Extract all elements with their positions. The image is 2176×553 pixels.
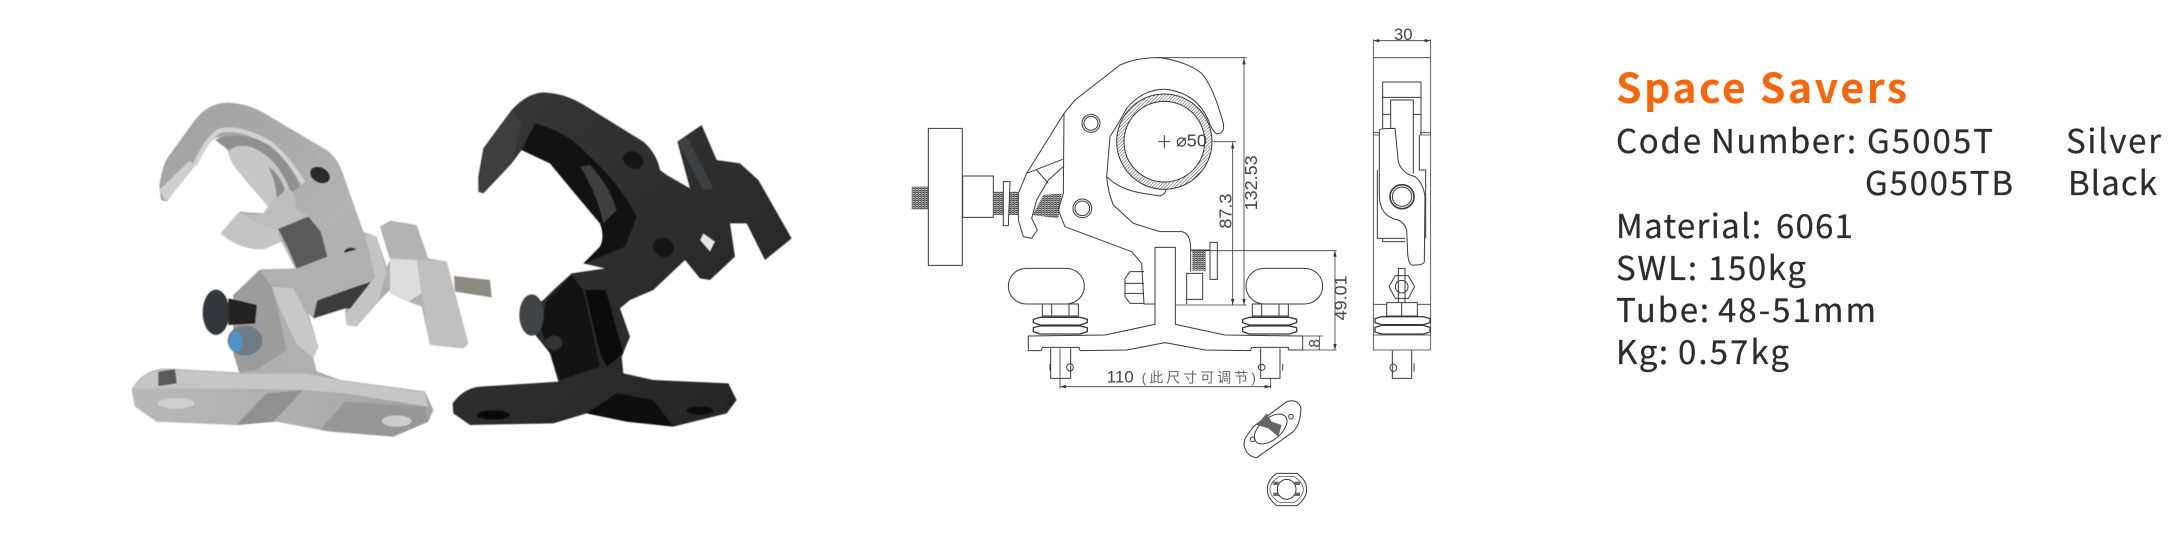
silver clamp: lower screw hole	[340, 244, 366, 269]
code number black: Black	[2068, 157, 2157, 205]
lever	[1018, 113, 1064, 238]
outer frame	[1373, 39, 1431, 350]
hex nut with pin	[1389, 268, 1415, 303]
silver clamp: front jaw	[240, 188, 308, 229]
right nut	[1252, 304, 1288, 316]
adjusting knob	[928, 128, 962, 265]
bottom bolt	[1390, 351, 1414, 378]
tube size: Tube:	[1616, 284, 1709, 332]
pin thread	[1192, 251, 1205, 271]
black clamp photo	[453, 92, 792, 427]
black clamp: bracket block	[540, 275, 600, 380]
dimension 110 note: 110	[1107, 368, 1134, 387]
silver clamp: latch	[345, 233, 387, 327]
stud threads	[994, 192, 1018, 215]
left bolt	[1050, 348, 1073, 378]
silver clamp: foot facet left	[237, 390, 303, 425]
black clamp: pin head	[519, 294, 544, 336]
black clamp: thumb screw face	[677, 137, 713, 190]
code number silver	[1616, 115, 2161, 163]
dimension 87.3: 87.3	[1216, 194, 1236, 229]
weight: Kg:	[1616, 326, 1668, 374]
inner stud thread	[1033, 193, 1062, 218]
silver clamp: silhouette	[132, 103, 433, 437]
tube diameter label: ⌀50	[1176, 131, 1207, 151]
right rubber knob	[1246, 268, 1323, 304]
silver clamp: rear jaw	[221, 213, 282, 249]
black clamp: socket screw	[546, 335, 562, 350]
width dimension	[1373, 39, 1431, 42]
weight	[1616, 326, 1789, 374]
dimension 110 note: (此尺寸可调节)	[1142, 370, 1259, 386]
silver clamp: upper screw hole	[307, 164, 333, 186]
silver clamp: foot facet right	[320, 402, 428, 437]
title: Space Savers	[1616, 55, 1907, 115]
black clamp: silhouette	[453, 92, 792, 427]
code number silver: G5005T	[1867, 115, 1993, 163]
tube size: 48-51mm	[1718, 284, 1876, 332]
weight: 0.57kg	[1678, 326, 1789, 374]
dimension arrows	[1060, 58, 1337, 388]
base nut	[1387, 303, 1417, 316]
silver clamp: slot shadow	[313, 282, 375, 318]
oval mounting plate detail	[1244, 401, 1301, 458]
width label 30: 30	[1394, 25, 1413, 44]
safe working load: SWL:	[1616, 242, 1697, 290]
dimension lines	[1060, 58, 1337, 389]
product specifications	[1616, 55, 2161, 374]
code number silver: Silver	[2066, 115, 2161, 163]
silver clamp photo	[132, 103, 492, 437]
black clamp: right foot hole	[687, 407, 713, 415]
silver clamp: thumb screw hub	[390, 258, 422, 302]
dimension 8: 8	[1307, 339, 1324, 348]
pin circle	[1395, 280, 1408, 293]
right bolt	[1258, 348, 1283, 378]
upper pivot pin	[1082, 114, 1100, 132]
pivot stud	[1390, 185, 1414, 209]
dimension 49.01: 49.01	[1331, 275, 1351, 320]
dimension 132.53: 132.53	[1241, 155, 1261, 210]
silver clamp: foot	[132, 368, 433, 437]
code number black: G5005TB	[1865, 157, 2013, 205]
silver clamp: slot	[272, 287, 318, 358]
silver clamp: cup shadow	[268, 167, 285, 200]
lower pivot pin	[1073, 199, 1092, 218]
black clamp: inner jaw	[522, 123, 637, 264]
tube edges	[1117, 94, 1212, 189]
safe working load	[1616, 242, 1806, 290]
pin flange	[1210, 242, 1217, 279]
black clamp: latch gap	[700, 233, 715, 252]
silver clamp: black pin	[228, 298, 257, 325]
knob thread	[912, 187, 928, 209]
tube size	[1616, 284, 1876, 332]
side view technical drawing	[1373, 25, 1431, 378]
silver clamp: hook tip facet	[159, 161, 196, 202]
right washers	[1243, 317, 1297, 334]
clamp body outline	[1058, 58, 1224, 304]
round plate detail	[1267, 473, 1307, 506]
black clamp: upper screw	[620, 148, 647, 172]
locknut	[1125, 272, 1144, 303]
silver clamp: right foot hole	[382, 415, 412, 427]
silver clamp: left foot hole	[158, 398, 194, 409]
left washers	[1033, 317, 1087, 334]
black clamp: inner jaw highlight	[580, 165, 617, 223]
pin block	[1187, 273, 1203, 304]
silver clamp: foot shadow	[158, 369, 177, 386]
silver clamp: foot top band	[133, 369, 428, 407]
silver clamp: tube cup	[228, 146, 289, 210]
silver clamp: steel screw	[228, 326, 262, 356]
material: 6061	[1776, 200, 1853, 248]
silver clamp: threaded stud	[454, 276, 492, 297]
washer	[1003, 182, 1010, 226]
hook profile	[1377, 82, 1426, 242]
silver clamp: pin head	[203, 290, 229, 335]
lever profile	[1379, 128, 1425, 265]
material	[1616, 200, 1853, 248]
left rubber knob	[1008, 268, 1084, 304]
silver clamp: thumb screw	[380, 221, 468, 348]
silver clamp: dark interior	[278, 217, 327, 268]
silver clamp: stem	[259, 245, 376, 372]
silver clamp: screw socket	[229, 331, 243, 352]
code number silver: Number:	[1711, 115, 1856, 163]
black clamp: foot facet	[587, 393, 673, 427]
silver clamp: hook shade	[215, 135, 300, 193]
code number silver: Code	[1616, 115, 1701, 163]
silver clamp: hook lip	[195, 130, 303, 183]
knob collar	[963, 176, 993, 217]
centre mark	[1158, 135, 1170, 148]
tube section	[1120, 98, 1208, 186]
left nut	[1042, 304, 1078, 316]
silver clamp: thumb screw face	[417, 260, 468, 348]
washers	[1375, 317, 1430, 334]
side pin assembly	[1191, 247, 1210, 272]
T-shaped base plate	[1028, 247, 1303, 351]
safe working load: 150kg	[1708, 242, 1806, 290]
black clamp: slot	[585, 290, 623, 367]
black clamp: lower screw	[650, 234, 677, 260]
material: Material:	[1616, 200, 1761, 248]
width arrows	[1373, 39, 1431, 42]
silver clamp: side block	[233, 270, 287, 373]
front view technical drawing	[912, 58, 1351, 506]
code number black	[1865, 157, 2157, 205]
black clamp: left foot hole	[477, 410, 510, 420]
black clamp: hook tip face	[478, 110, 522, 193]
